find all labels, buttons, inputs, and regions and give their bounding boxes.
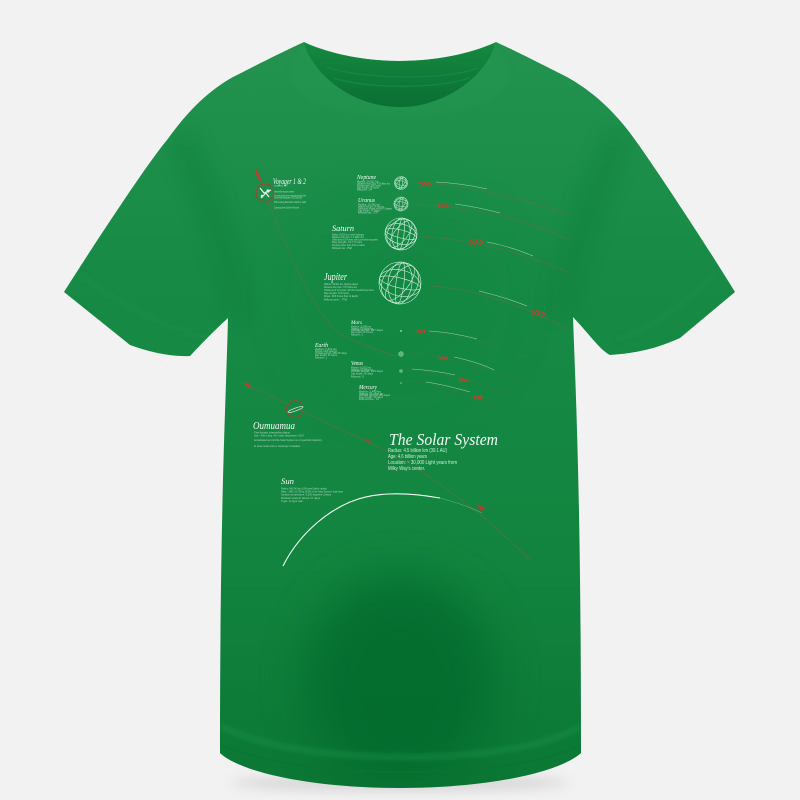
- icon: oumuamua marker: [287, 401, 303, 417]
- sun arc: [283, 494, 482, 566]
- planet: neptune text: Moons: 14: [357, 188, 373, 192]
- orbit: mars: [405, 330, 530, 358]
- text: sun: Radius: 696,340 km (109 times Earth's radius): [281, 486, 327, 490]
- planet: venus text: [351, 361, 384, 378]
- icon: mars: [400, 330, 402, 332]
- planet: jupiter text: Moons: 79: [324, 298, 348, 302]
- planet: venus text: Radius: 6,052 km: [351, 366, 372, 370]
- text: oumuamua: Its name means scout or messenger in Hawaiian: [254, 444, 300, 448]
- planet: mercury text: Moons: 0: [359, 397, 380, 401]
- orbit: uranus: [415, 204, 568, 239]
- planet: mercury text: Orbital period: 88 days: [359, 393, 391, 397]
- printed artwork: [243, 167, 570, 566]
- planet: mercury text: Distance: 58 million km: [359, 392, 384, 396]
- text: sun: [281, 476, 344, 503]
- text: oumuamua: [253, 421, 323, 448]
- text: solar system facts: [388, 448, 457, 472]
- planet: uranus text: [358, 197, 392, 214]
- text: sun: Type: G-type star: [281, 499, 303, 503]
- planet: uranus text: Moons: 27: [358, 210, 379, 214]
- planet: mercury text: [358, 385, 391, 401]
- planet: venus text: Day length: 243 days: [351, 372, 374, 376]
- planet: mars text: Orbital period: 687 days: [351, 328, 384, 332]
- orbit: jupiter: [430, 286, 570, 330]
- planet: mars text: Moons: 2: [351, 332, 364, 336]
- icon: voyager rocket: [255, 167, 265, 184]
- text: oumuamua: Size: ~400 m long, 40 m wide, discovered in 2017: [254, 434, 304, 438]
- planet: jupiter text: Day length: 9.9 hours: [324, 291, 350, 295]
- icon: neptune sphere: [393, 175, 409, 191]
- planet: neptune text: Radius: 24,622 km: [357, 180, 380, 184]
- planet: jupiter text: Mass: 318 times that of Earth: [324, 294, 358, 298]
- text: oumuamua: First known interstellar object: [254, 430, 290, 434]
- icon: jupiter sphere: [374, 256, 426, 310]
- planet: jupiter text: Jupiter: [324, 272, 348, 283]
- planet: saturn text: Radius: 58,232 km, mostly hydrogen: [332, 232, 364, 236]
- planet: uranus text: Uranus: [358, 197, 375, 204]
- orbit: neptune: [416, 182, 570, 215]
- planet: neptune text: [356, 174, 391, 192]
- planet: jupiter text: Radius: 69,911 km, largest planet: [324, 282, 358, 286]
- orbit: earth: [405, 354, 525, 385]
- planet: mercury text: Mercury: [358, 385, 377, 391]
- planet: earth text: Distance: 149.6 million km: [315, 349, 338, 353]
- marker: solar system arrow: [477, 504, 486, 511]
- planet: venus text: Moons: 0: [351, 374, 365, 378]
- trajectory: voyager: [268, 201, 395, 356]
- planet: saturn text: Density lower than that of water: [332, 243, 365, 247]
- collar label band: [327, 67, 478, 86]
- text: sun: Rotation period: about 27 days: [281, 496, 321, 500]
- icon: saturn sphere: [381, 213, 421, 255]
- planet: uranus text: Radius: 25,362 km: [358, 202, 381, 206]
- text: voyager: Interstellar space probes: [274, 190, 294, 194]
- planet: neptune text: Orbital period: 164.8 years: [357, 184, 381, 188]
- hem shadow: [230, 775, 570, 791]
- text: oumuamua: Oumuamua: [253, 421, 295, 432]
- text: voyager: Voyager 1 & 2: [273, 177, 306, 186]
- planet: earth text: Day length: 24 hours: [315, 353, 338, 357]
- planet: earth text: [314, 343, 348, 360]
- planet: uranus text: Day length: 17 hours: [358, 208, 381, 212]
- planet: mars text: Day length: 24.6 hours: [351, 330, 374, 334]
- text: sun: Surface temperature: 5,500 degrees Celsius: [281, 492, 332, 496]
- icon: uranus sphere: [392, 195, 410, 213]
- text: voyager: Crossed the heliopause in 2012 and 2018: [274, 196, 302, 200]
- planet: jupiter text: Distance from Sun: 778 million km: [324, 285, 358, 289]
- planet: mars text: Distance: 228 million km: [351, 326, 374, 330]
- planet: venus text: Distance: 108 million km: [351, 368, 374, 372]
- planet: earth text: Moons: 1: [315, 356, 328, 360]
- text: voyager: The most distant human-made objects from Earth: [274, 194, 306, 198]
- text: sun: Sun: [281, 476, 294, 486]
- planet: neptune text: Distance from Sun: 4.5 billion km: [357, 182, 391, 186]
- trajectory: oumuamua: [243, 382, 530, 560]
- orbit: mercury: [405, 381, 495, 408]
- planet: earth text: Orbital period: 365.25 days: [315, 351, 348, 355]
- icon: voyager marker: [256, 184, 274, 202]
- planet: mercury text: Radius: 2,440 km: [359, 390, 382, 394]
- icon: venus: [399, 369, 403, 373]
- planet: saturn text: Moons: 82: [332, 246, 353, 250]
- planet: earth text: Radius: 6,371 km: [315, 347, 338, 351]
- planet: saturn text: [332, 223, 379, 250]
- planet: uranus text: Orbital period: 84 years, axial tilt 97.8 degrees: [358, 206, 392, 210]
- text: voyager: [273, 177, 306, 210]
- icon: mercury: [400, 382, 402, 384]
- planet: venus text: Orbital period: 225 days: [351, 369, 384, 373]
- title: The Solar System: [389, 430, 498, 449]
- planet: neptune text: Neptune: [356, 174, 376, 181]
- orbit: venus: [405, 369, 510, 396]
- text: solar system facts: Radius: 4.5 billion km (30.1 AU): [388, 448, 447, 454]
- planet: earth text: Earth: [314, 343, 328, 349]
- planet: mars text: Radius: 3,390 km: [351, 324, 372, 328]
- planet: mars text: Mars: [350, 320, 362, 326]
- orbit: saturn: [422, 236, 570, 273]
- text: voyager: Launched 1977: [274, 184, 288, 188]
- icon: earth: [399, 352, 403, 356]
- text: voyager: Carrying the Golden Record: [274, 206, 299, 210]
- text: oumuamua: Accelerated as it left the Solar System on a hyperbolic trajectory: [254, 438, 323, 442]
- planet: saturn text: Saturn: [332, 223, 354, 233]
- planet: saturn text: Distance from Sun: 1.4 billion km: [332, 235, 365, 239]
- planet: jupiter text: Orbital period: 11.9 years, with the Great Red Spot storm: [324, 288, 375, 292]
- text: solar system facts: Location: ~ 30,000 Light years from: [388, 460, 457, 466]
- text: voyager: Still sending data back to Earth by radio: [274, 200, 306, 204]
- planet: saturn text: Orbital period: 29.4 years, with a prominent ring system: [332, 238, 379, 242]
- t-shirt: [64, 42, 735, 788]
- planet: mercury text: Day length: 59 days: [359, 395, 384, 399]
- planet: venus text: Venus: [351, 361, 364, 367]
- text: sun: Mass: 1.989 x 10^30 kg, 99.8% of the Solar System's total mass: [281, 490, 344, 494]
- planet: mars text: [350, 320, 384, 336]
- planet: uranus text: Distance from Sun: 2.9 billion km: [358, 204, 384, 208]
- text: solar system facts: Milky Way's center.: [388, 466, 425, 472]
- planet: neptune text: Day length: 16 hours: [357, 186, 380, 190]
- planet: saturn text: Day length: 10.7 hours: [332, 240, 363, 244]
- inner collar: [304, 43, 495, 107]
- planet: jupiter text: [324, 272, 375, 302]
- text: solar system facts: Age: 4.6 billion years: [388, 454, 427, 460]
